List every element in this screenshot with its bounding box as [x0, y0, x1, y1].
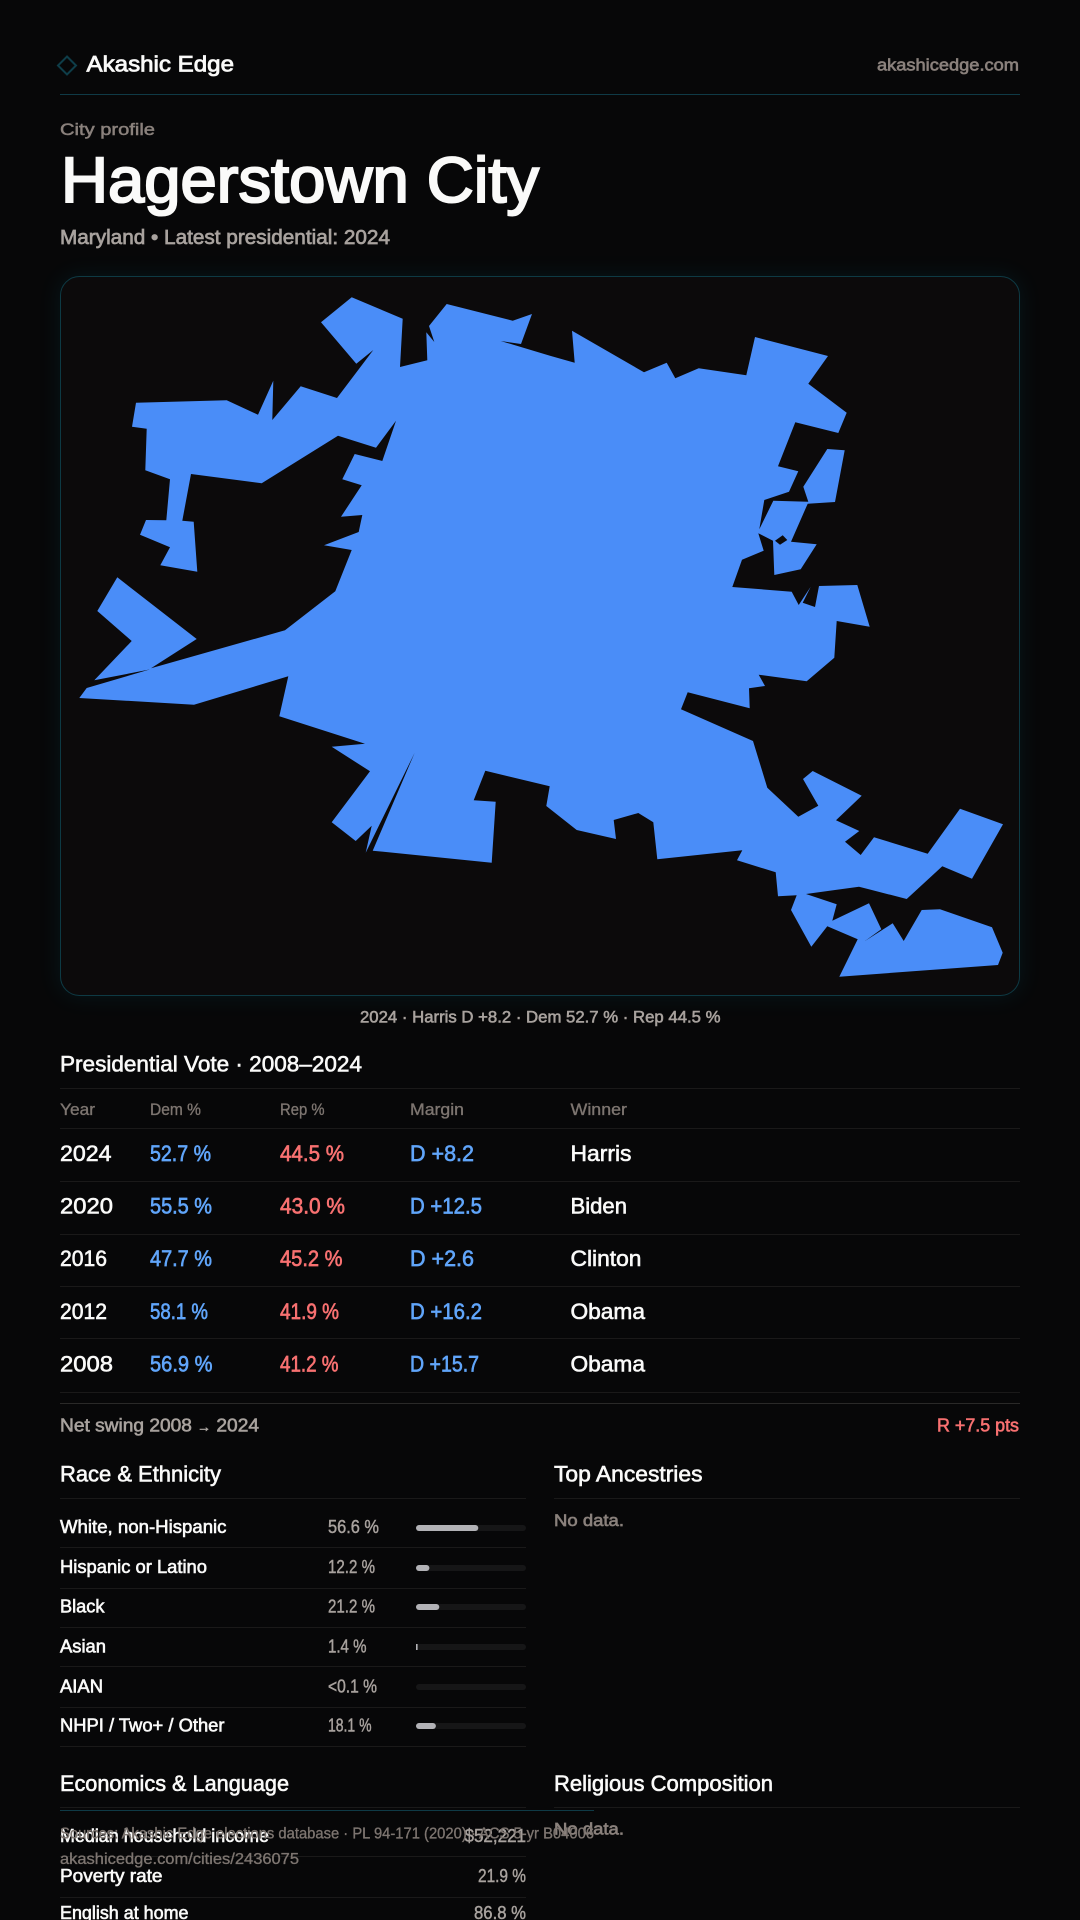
table header: Rep % — [280, 1100, 324, 1119]
row 2012: 58.1 % — [150, 1299, 208, 1324]
icon: diamond logo — [58, 56, 76, 74]
row 2020: 55.5 % — [150, 1194, 212, 1218]
row 2008: Obama — [570, 1352, 646, 1376]
heading: Top Ancestries — [554, 1462, 702, 1486]
heading: Economics & Language — [60, 1771, 289, 1796]
row asian: Asian — [60, 1636, 106, 1656]
row white: 56.6 % — [328, 1517, 379, 1537]
row hispanic: Hispanic or Latino — [60, 1557, 207, 1577]
row 2020: D +12.5 — [410, 1194, 482, 1218]
row 2012: 2012 — [60, 1299, 107, 1324]
row aian: AIAN — [60, 1676, 103, 1696]
row white — [60, 1517, 526, 1537]
row 2008 — [60, 1352, 646, 1376]
row 2020: 2020 — [60, 1194, 113, 1218]
row median income: Median household income — [60, 1826, 269, 1846]
panel: top ancestries — [554, 1462, 1020, 1530]
row 2020: 43.0 % — [280, 1194, 345, 1218]
row english — [60, 1903, 526, 1920]
row 2020: Biden — [570, 1194, 627, 1218]
city boundary shape — [79, 297, 1003, 977]
row 2024: Harris — [570, 1141, 632, 1166]
net swing summary: R +7.5 pts — [937, 1416, 1019, 1436]
title block — [60, 120, 539, 249]
row 2020 — [60, 1194, 627, 1218]
table header — [60, 1100, 627, 1119]
row poverty: 21.9 % — [478, 1866, 526, 1886]
row 2024 — [60, 1141, 632, 1166]
row 2024: 2024 — [60, 1141, 112, 1166]
footer overlay — [60, 1810, 594, 1868]
table header: Margin — [410, 1100, 464, 1119]
sources note: Sources: Akashic Edge elections database · PL 94-171 (2020) · ACS 5-yr B04006 — [60, 1826, 594, 1842]
row 2024: D +8.2 — [410, 1141, 474, 1166]
row 2012 — [60, 1299, 646, 1324]
subtitle: Maryland • Latest presidential: 2024 — [60, 227, 390, 249]
row 2008: 56.9 % — [150, 1352, 212, 1376]
row poverty: Poverty rate — [60, 1866, 162, 1886]
site url: akashicedge.com — [877, 56, 1019, 74]
row aian — [60, 1676, 526, 1696]
row aian: <0.1 % — [328, 1676, 377, 1696]
row 2016: 45.2 % — [280, 1246, 342, 1271]
net swing summary: Net swing 2008 → 2024 — [60, 1416, 259, 1436]
row asian: 1.4 % — [328, 1636, 366, 1656]
row 2008: 41.2 % — [280, 1352, 338, 1376]
row hispanic — [60, 1557, 526, 1577]
panel: city map — [60, 276, 1020, 996]
row 2012: D +16.2 — [410, 1299, 482, 1324]
row 2016 — [60, 1246, 642, 1271]
row 2012: 41.9 % — [280, 1299, 339, 1324]
row nhpi — [60, 1716, 526, 1736]
row 2012: Obama — [570, 1299, 646, 1324]
eyebrow: City profile — [60, 120, 155, 139]
table header: Winner — [570, 1100, 627, 1119]
row 2024: 52.7 % — [150, 1141, 211, 1166]
row nhpi: 18.1 % — [328, 1716, 372, 1736]
row median income: $52,221 — [464, 1826, 526, 1846]
panel: economics and language — [60, 1771, 526, 1920]
header: brand bar — [58, 52, 1020, 94]
table header: Year — [60, 1100, 95, 1119]
row asian — [60, 1636, 526, 1656]
row 2024: 44.5 % — [280, 1141, 344, 1166]
row median income — [60, 1826, 526, 1846]
row 2016: D +2.6 — [410, 1246, 474, 1271]
empty state: No data. — [554, 1511, 624, 1530]
row black: 21.2 % — [328, 1596, 375, 1616]
row 2008: D +15.7 — [410, 1352, 479, 1376]
row black — [60, 1596, 526, 1616]
map caption: 2024 · Harris D +8.2 · Dem 52.7 % · Rep 44.5 % — [360, 1008, 720, 1026]
net swing summary — [60, 1416, 1019, 1436]
row 2016: Clinton — [570, 1246, 642, 1271]
brand name: Akashic Edge — [86, 52, 234, 76]
row poverty — [60, 1866, 526, 1886]
row nhpi: NHPI / Two+ / Other — [60, 1716, 224, 1736]
row black: Black — [60, 1596, 106, 1616]
empty state: No data. — [554, 1820, 624, 1838]
page url: akashicedge.com/cities/2436075 — [60, 1851, 299, 1868]
title: Hagerstown City — [61, 144, 539, 216]
heading: Presidential Vote · 2008–2024 — [60, 1052, 362, 1076]
panel: race and ethnicity — [60, 1462, 526, 1746]
row hispanic: 12.2 % — [328, 1557, 375, 1577]
heading: Race & Ethnicity — [60, 1462, 221, 1486]
row 2008: 2008 — [60, 1352, 113, 1376]
panel: religious composition — [554, 1771, 1020, 1838]
panel: presidential vote table — [60, 1052, 1020, 1436]
table header: Dem % — [150, 1100, 201, 1119]
row 2016: 47.7 % — [150, 1246, 212, 1271]
row 2016: 2016 — [60, 1246, 107, 1271]
heading: Religious Composition — [554, 1771, 773, 1796]
row white: White, non-Hispanic — [60, 1517, 226, 1537]
